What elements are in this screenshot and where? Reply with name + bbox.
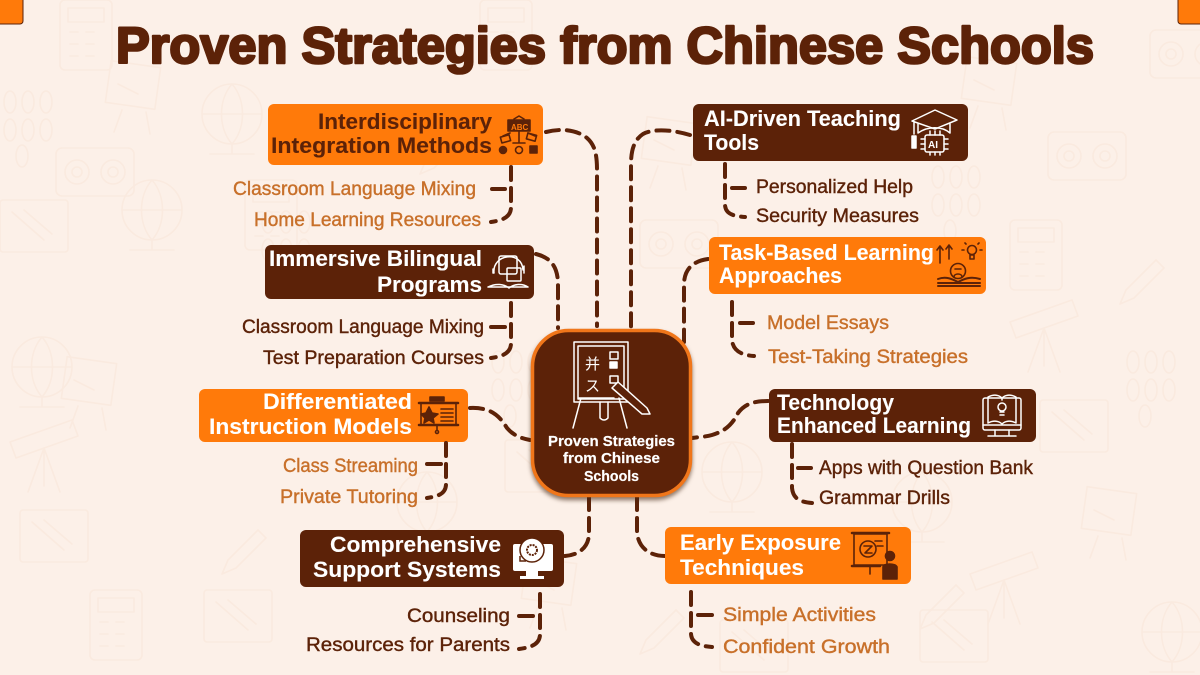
list item: Class Streaming [283, 455, 418, 477]
header box [199, 389, 468, 442]
heading: Early Exposure [680, 530, 841, 555]
heading: Integration Methods [271, 133, 492, 158]
heading: Approaches [719, 263, 842, 288]
heading: AI-Driven Teaching [704, 106, 901, 131]
heading: Enhanced Learning [777, 413, 971, 438]
list item: Apps with Question Bank [819, 457, 1033, 479]
heading: Programs [377, 272, 482, 297]
heading [704, 106, 901, 155]
header box [769, 389, 1036, 442]
list item: Classroom Language Mixing [233, 178, 476, 200]
panel: Immersive Bilingual Programs [242, 245, 534, 369]
list item: Counseling [407, 605, 510, 627]
header box [709, 237, 986, 294]
corner tab: top right [1178, 0, 1200, 24]
list item: Classroom Language Mixing [242, 316, 484, 338]
list item: Private Tutoring [280, 486, 418, 508]
heading: Techniques [680, 555, 804, 580]
header box [300, 530, 564, 587]
panel: Technology Enhanced Learning [769, 389, 1036, 509]
header box [665, 527, 911, 584]
list item: Test-Taking Strategies [768, 346, 968, 368]
list item: Model Essays [767, 312, 889, 334]
sub-branch connector [732, 302, 754, 356]
list item: Security Measures [756, 205, 919, 227]
icon: classroom board with pencil: ス [585, 375, 600, 396]
corner tab: top left [0, 0, 23, 24]
sub-branch connector [792, 444, 812, 503]
list item: Simple Activities [723, 604, 876, 626]
header box [693, 104, 968, 161]
icon: ABC board and shapes: ABC [511, 123, 529, 132]
heading [680, 530, 841, 580]
heading: Comprehensive [330, 532, 501, 557]
sub-branch connector [491, 167, 511, 222]
panel: Early Exposure Techniques [665, 527, 911, 658]
sub-branch connector [725, 164, 745, 217]
heading: Immersive Bilingual [269, 246, 482, 271]
heading: Task-Based Learning [719, 240, 934, 265]
list item: Home Learning Resources [254, 209, 481, 231]
icon: graduation cap with AI chip [912, 110, 957, 155]
header box [268, 104, 543, 165]
heading: Differentiated [263, 389, 412, 414]
icon: arrows, lightbulb and book with student [937, 243, 982, 286]
heading: Instruction Models [209, 414, 412, 439]
sub-branch connector [519, 594, 540, 649]
panel: Comprehensive Support Systems [300, 530, 564, 656]
sub-branch connector [491, 303, 511, 358]
panel: Differentiated Instruction Models [199, 389, 468, 508]
icon: monitor with book and lightbulb [983, 395, 1021, 436]
heading [313, 532, 501, 582]
icon: headset and book [488, 256, 528, 288]
list item: Grammar Drills [819, 487, 950, 509]
panel: Interdisciplinary Integration Methods [233, 104, 543, 231]
icon: teacher at presentation board [852, 533, 897, 579]
title: Proven Strategies from Chinese Schools [116, 17, 1094, 74]
heading: Support Systems [313, 557, 501, 582]
icon: graduation cap with AI chip: AI [928, 140, 938, 151]
hub box [532, 330, 690, 496]
heading: Tools [704, 130, 759, 155]
panel: AI-Driven Teaching Tools [693, 104, 968, 227]
icon: classroom board with pencil: 并 [585, 353, 600, 374]
heading: Technology [777, 390, 894, 415]
connectors: hub to panels [470, 130, 768, 556]
sub-branch connector [691, 592, 712, 647]
list item: Confident Growth [723, 636, 890, 658]
list item: Resources for Parents [306, 634, 510, 656]
heading [271, 109, 492, 158]
panel: Task-Based Learning Approaches [709, 237, 986, 368]
sub-branch connector [427, 443, 446, 498]
icon: classroom board with pencil [573, 342, 650, 428]
header box [265, 245, 534, 299]
hub label: from Chinese [563, 451, 660, 467]
icon: ABC board and shapes [500, 116, 537, 154]
hub label [548, 434, 675, 485]
list item: Personalized Help [756, 176, 913, 198]
central hub [532, 330, 690, 496]
list item: Test Preparation Courses [263, 347, 484, 369]
hub label: Schools [584, 469, 639, 485]
heading: Interdisciplinary [318, 109, 492, 134]
icon: monitor with gear and headset [513, 538, 553, 579]
heading [719, 240, 934, 288]
heading [777, 390, 971, 438]
heading [209, 389, 412, 439]
heading [269, 246, 482, 297]
hub label: Proven Strategies [548, 434, 675, 450]
icon: presentation board with star [419, 397, 458, 434]
